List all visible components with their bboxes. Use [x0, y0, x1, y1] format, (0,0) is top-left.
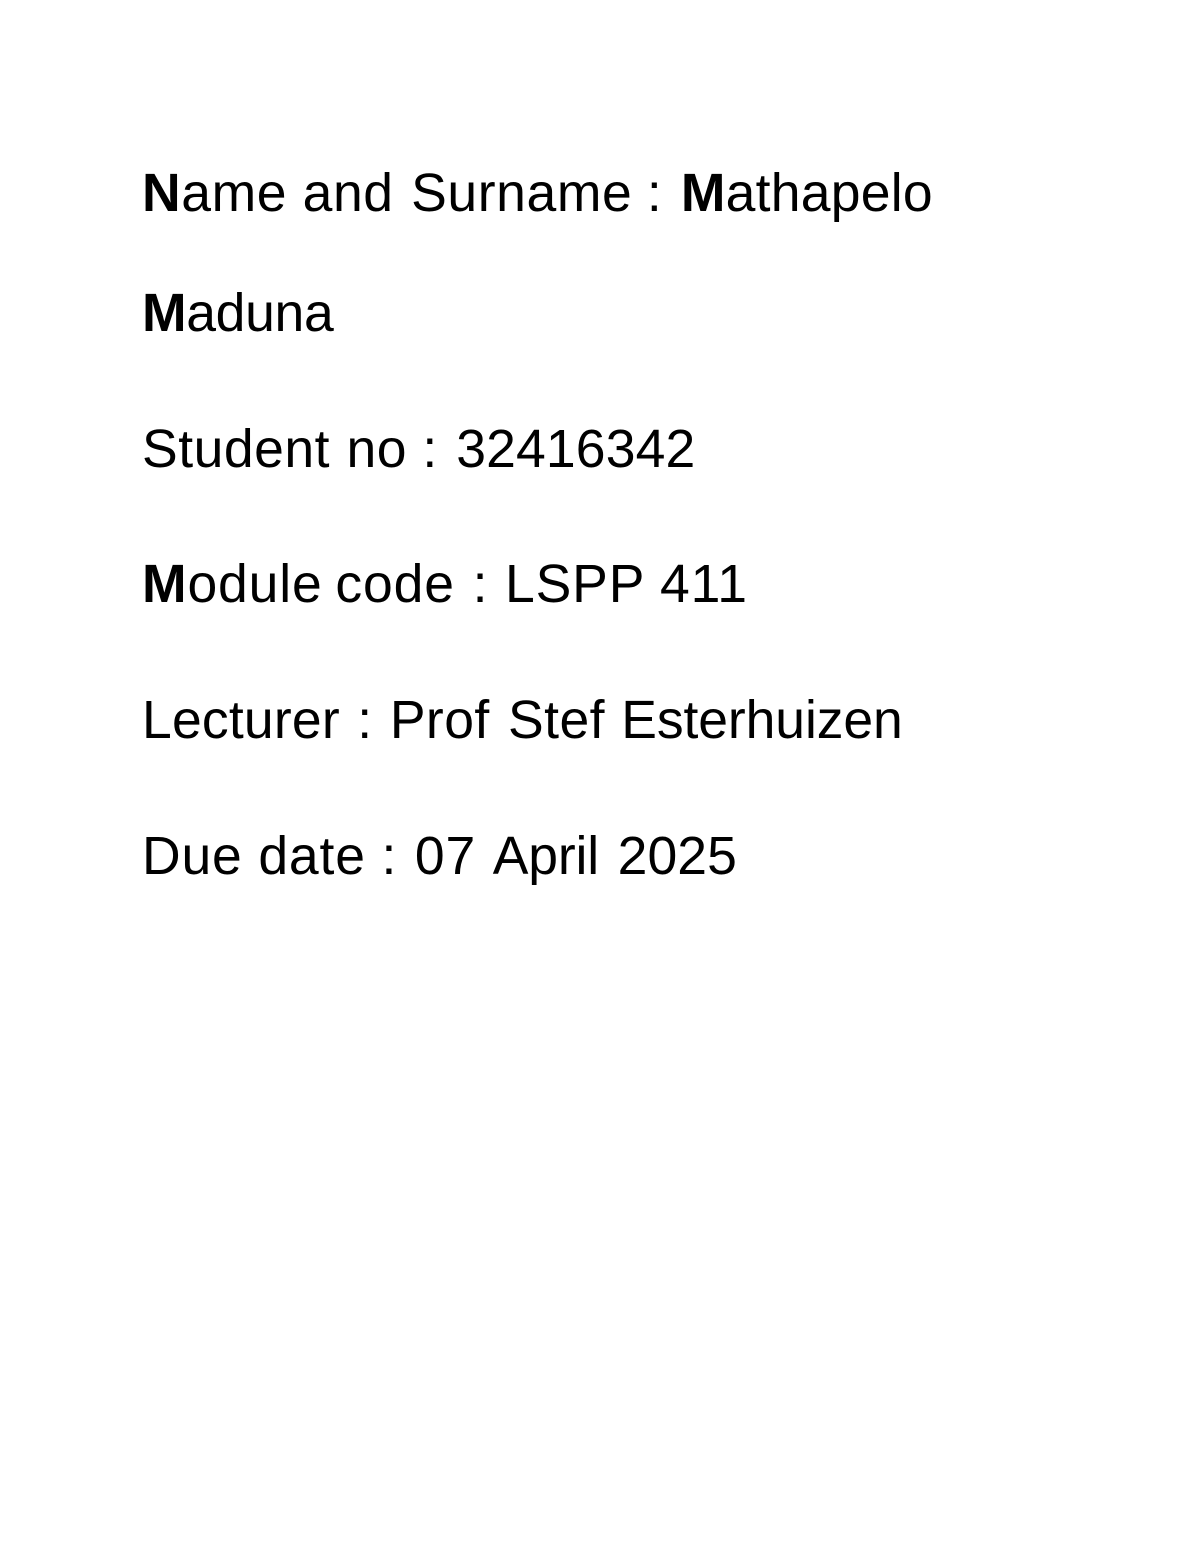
text: due date: Due date : 07 April 2025	[142, 827, 737, 886]
text: module code: Module code : LSPP 411	[142, 555, 748, 614]
text: name and surname line 2: Maduna	[142, 284, 333, 343]
text: name and surname line 1: Name and Surname : Mathapelo	[142, 164, 933, 223]
text: student number: Student no : 32416342	[142, 420, 695, 479]
text: lecturer: Lecturer : Prof Stef Esterhuizen	[142, 691, 903, 750]
